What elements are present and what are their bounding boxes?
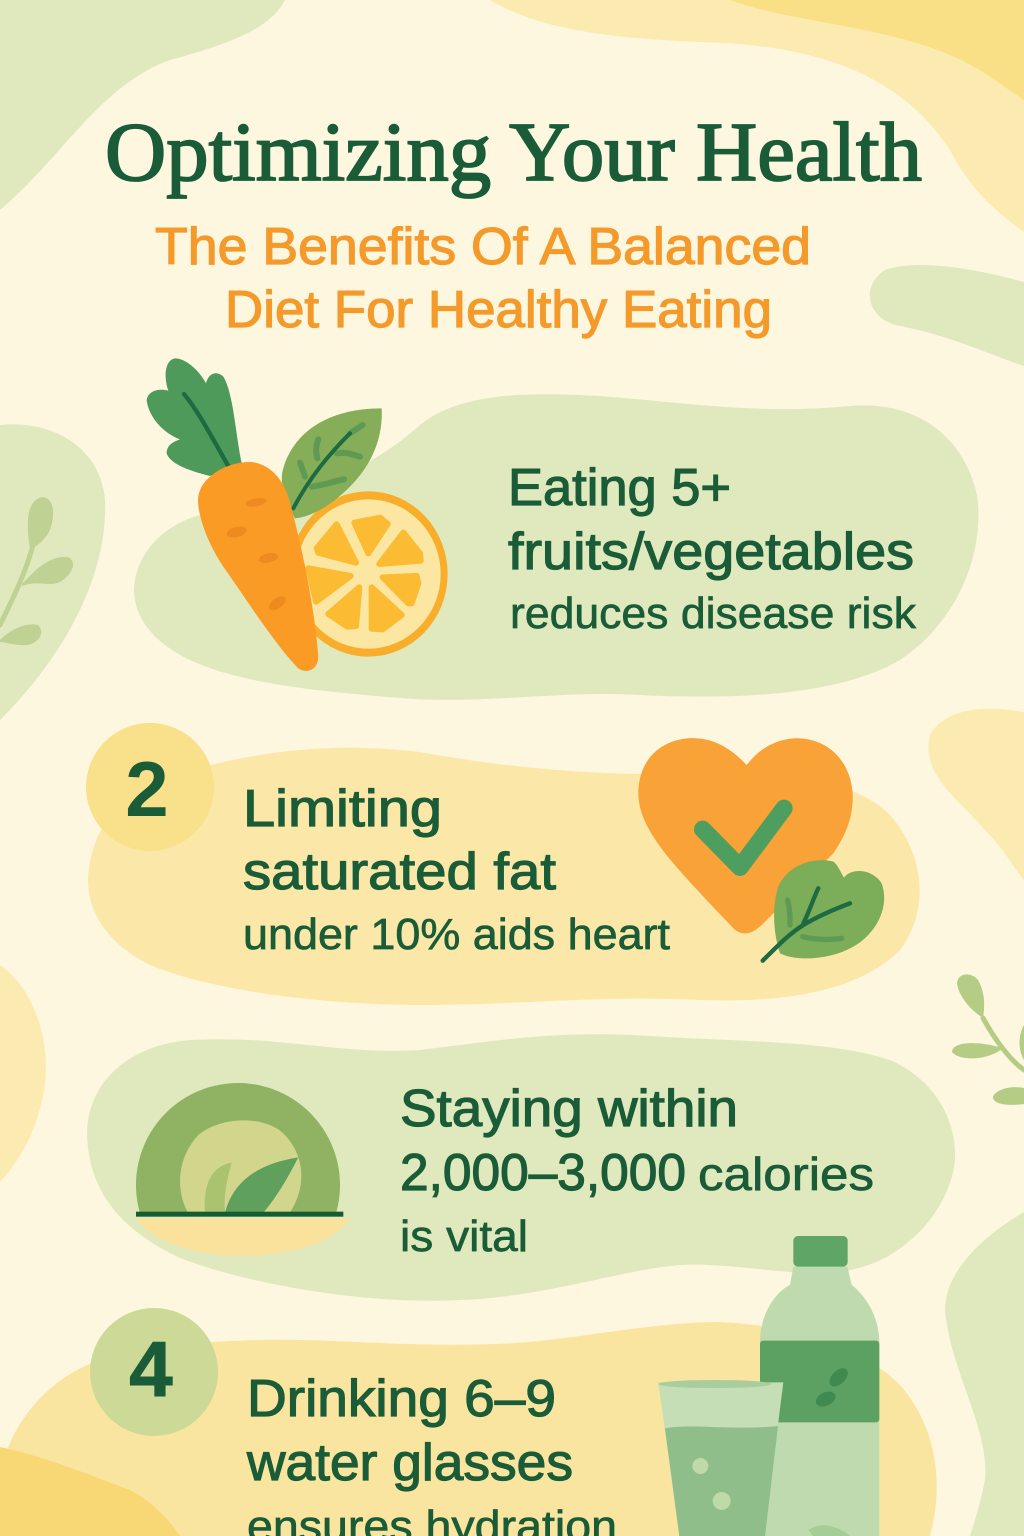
panel 2: saturated fat [86, 723, 920, 1005]
subtitle: The Benefits Of A Balanced [155, 218, 811, 276]
sprig: right decoration [952, 974, 1024, 1105]
subtitle [155, 218, 811, 339]
panel 3 text: 2,000–3,000 [400, 1144, 686, 1202]
title: Optimizing Your Health [105, 106, 922, 199]
number badge 2: 2 [125, 745, 169, 833]
panel 2 text: Limiting [243, 780, 442, 838]
subtitle: Diet For Healthy Eating [225, 281, 772, 339]
number badge 4 [90, 1308, 218, 1436]
panel 1 text: fruits/vegetables [508, 523, 914, 581]
sprig: left decoration [0, 497, 73, 645]
number badge 4: 4 [129, 1325, 173, 1413]
panel 1 text [508, 459, 917, 638]
panel 3 text: calories [698, 1148, 874, 1200]
panel 3 background [87, 1034, 955, 1301]
icon: plate with leaf [136, 1083, 350, 1256]
panel 2 text: under 10% aids heart [243, 910, 670, 959]
panel 3 text: is vital [400, 1212, 528, 1261]
panel 3 text [400, 1080, 874, 1261]
panel 4 background [0, 1322, 937, 1536]
panel 2 background [88, 748, 920, 1005]
panel 4: hydration [0, 1236, 937, 1536]
panel 1 text: Eating 5+ [508, 459, 731, 517]
number badge 2 [86, 723, 214, 851]
panel 1 text: reduces disease risk [510, 589, 917, 638]
panel 4 text [246, 1370, 617, 1536]
panel 1: fruits and vegetables [134, 358, 978, 700]
panel 1 background [134, 394, 978, 700]
panel 4 text: Drinking 6–9 [247, 1370, 556, 1428]
panel 3 text: Staying within [400, 1080, 738, 1138]
icon: carrot, leaf and orange slice [147, 358, 448, 671]
bottom-left darker blob [0, 1447, 180, 1536]
panel 2 text [243, 780, 670, 959]
panel 4 text: water glasses [246, 1434, 573, 1492]
icon: water bottle and glass [658, 1236, 879, 1536]
panel 3: calories [87, 1034, 955, 1301]
panel 2 text: saturated fat [243, 843, 557, 901]
icon: heart with check and leaf [638, 738, 884, 961]
